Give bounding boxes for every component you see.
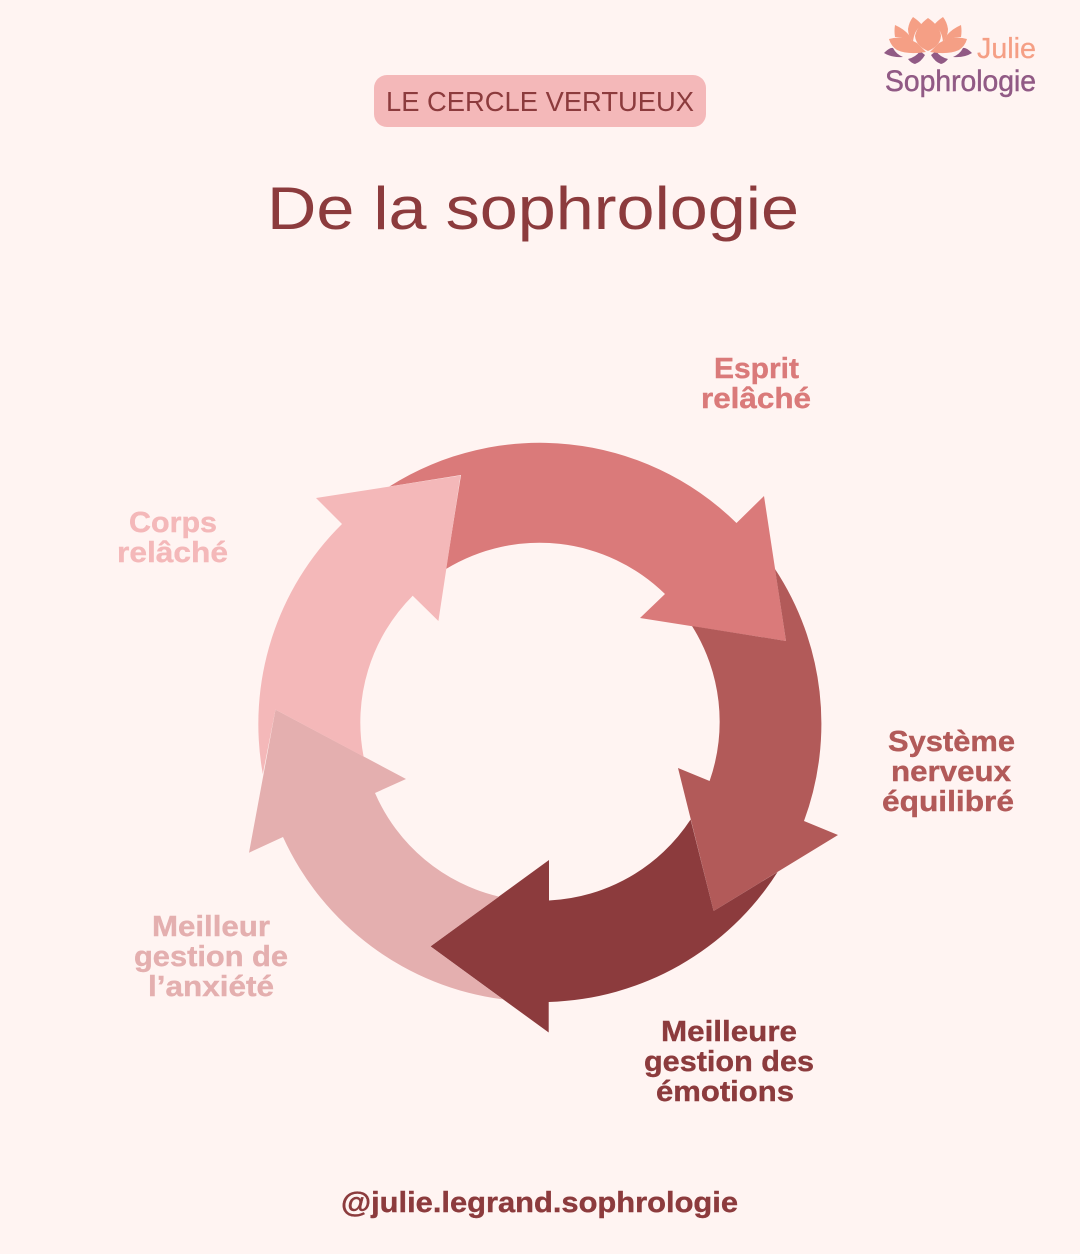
- label: esprit relâché: [701, 353, 811, 415]
- arrow: système nerveux équilibré: [678, 569, 838, 911]
- badge: le cercle vertueux: [374, 75, 706, 127]
- label: corps relâché: Corps: [129, 507, 217, 539]
- label: système nerveux équilibré: [882, 726, 1015, 818]
- icon: lotus: [884, 17, 972, 64]
- label: meilleur gestion de l'anxiété: gestion de: [134, 941, 288, 973]
- logo word: Sophrologie: Sophrologie: [885, 65, 1036, 98]
- label: esprit relâché: relâché: [701, 383, 811, 415]
- label: meilleure gestion des émotions: [644, 1016, 814, 1108]
- badge: le cercle vertueux: LE CERCLE VERTUEUX: [386, 86, 694, 117]
- footer handle: @julie.legrand.sophrologie: [341, 1187, 738, 1219]
- label: meilleur gestion de l'anxiété: [134, 911, 288, 1003]
- arrow: meilleur gestion de l'anxiété: [249, 710, 503, 999]
- label: esprit relâché: Esprit: [714, 353, 799, 385]
- label: meilleure gestion des émotions: émotions: [656, 1076, 794, 1108]
- label: meilleure gestion des émotions: Meilleure: [661, 1016, 797, 1048]
- arrow: corps relâché: [258, 476, 460, 774]
- label: corps relâché: [117, 507, 228, 569]
- arrow: meilleure gestion des émotions: [430, 820, 778, 1032]
- label: système nerveux équilibré: équilibré: [882, 786, 1014, 818]
- label: système nerveux équilibré: Système: [888, 726, 1015, 758]
- label: meilleur gestion de l'anxiété: l’anxiété: [148, 971, 274, 1003]
- logo: Julie Sophrologie: [884, 17, 1036, 98]
- label: corps relâché: relâché: [117, 537, 228, 569]
- arrow: esprit relâché: [389, 443, 786, 641]
- label: système nerveux équilibré: nerveux: [891, 756, 1011, 788]
- circular diagram: [249, 443, 838, 1032]
- label: meilleure gestion des émotions: gestion des: [644, 1046, 814, 1078]
- title: De la sophrologie: [267, 175, 799, 242]
- logo word: Julie: Julie: [977, 33, 1036, 65]
- label: meilleur gestion de l'anxiété: Meilleur: [152, 911, 270, 943]
